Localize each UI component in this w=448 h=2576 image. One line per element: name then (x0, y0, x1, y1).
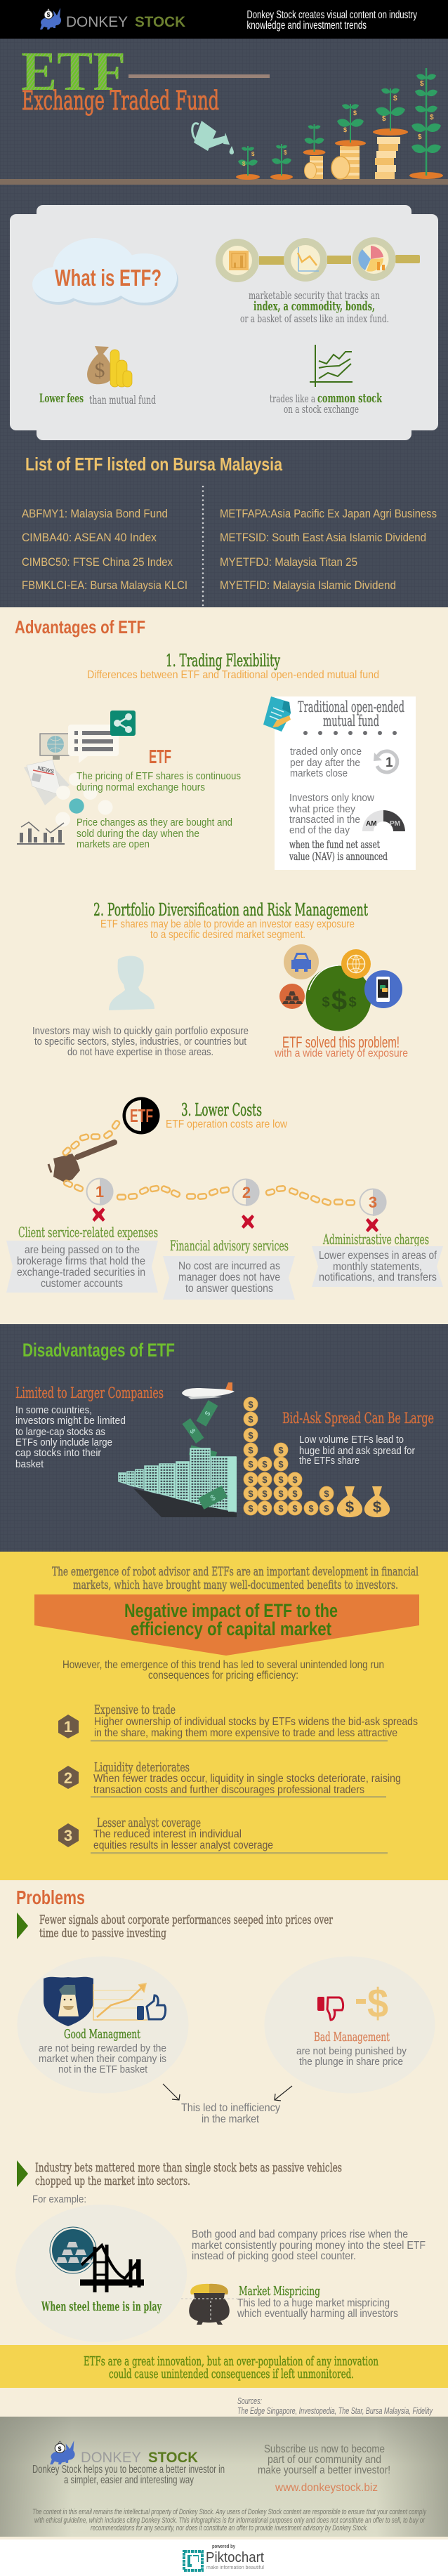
plant 6: $ (420, 80, 424, 88)
consequence 2: 2 (64, 1769, 72, 1787)
icon: thumbs down (317, 1997, 343, 2020)
icon row: index, commodity, bonds (216, 237, 420, 282)
consequence 3 (58, 1816, 388, 1854)
bad management text: the plunge in share price (299, 2056, 403, 2068)
heading: lower costs: ETF operation costs are low (166, 1118, 287, 1130)
cost item 1: Client service-related expenses (18, 1224, 158, 1241)
inefficiency text: This led to inefficiency (181, 2102, 280, 2114)
icon: stacks of coins: $ (292, 1503, 298, 1514)
plant 4: $ (353, 110, 357, 117)
divider (202, 487, 204, 607)
heading: advantages: Advantages of ETF (15, 616, 145, 638)
panel: traditional mutual fund: mutual fund (323, 713, 379, 729)
icon: money bags: $ (345, 1498, 354, 1516)
good management text: Good Managment (64, 2027, 141, 2042)
good management text (39, 2027, 166, 2075)
consequence 2 (58, 1760, 401, 1797)
ETF solved text (274, 1033, 408, 1059)
consequence 1: in the share, making them more expensive to trade and less attractive (94, 1727, 397, 1739)
good management text: are not being rewarded by the (39, 2042, 166, 2054)
heading: disadvantages: Disadvantages of ETF (22, 1340, 175, 1361)
header tagline (247, 9, 417, 32)
icon: stacks of coins: $ (248, 1474, 253, 1485)
cost item 2: manager does not have (178, 1272, 280, 1283)
icon: share (110, 711, 136, 736)
icon: red crosses (93, 1208, 378, 1232)
NAV pricing text: end of the day (289, 824, 350, 836)
limited to larger companies text: investors might be limited (15, 1415, 126, 1427)
ETF list left column: CIMBC50: FTSE China 25 Index (22, 555, 173, 569)
icon: growing plants on coin stacks (236, 68, 443, 180)
ETF list right column: MYETFID: Malaysia Islamic Dividend (220, 579, 396, 592)
gold bubble (279, 984, 305, 1009)
icon: stacks of coins: $ (248, 1399, 253, 1410)
ETF list left column: FBMKLCI-EA: Bursa Malaysia KLCI (22, 579, 187, 592)
arrow: right (275, 2086, 292, 2101)
icon: money bags (337, 1486, 390, 1517)
shelf (0, 179, 448, 185)
heading: problems: Problems (16, 1887, 85, 1908)
subscribe text: Subscribe us now to become (264, 2443, 385, 2455)
footer logo: $ (58, 2445, 62, 2452)
cost item 1 (6, 1224, 158, 1293)
numbered steps (87, 1178, 386, 1216)
logo wordmark: STOCK (135, 14, 185, 30)
market mispricing text: which eventually harming all investors (237, 2308, 398, 2320)
market mispricing text: This led to a huge market mispricing (237, 2297, 390, 2309)
globe bubble (341, 949, 371, 979)
definition text: marketable security that tracks an (249, 289, 380, 302)
icon: person silhouette (109, 956, 154, 1010)
ETF list right column (220, 507, 437, 592)
footer logo (50, 2440, 198, 2466)
ETF column text: ETF (149, 746, 171, 767)
cost item 3: notifications, and transfers (319, 1272, 437, 1283)
bid-ask spread text: the ETFs share (299, 1455, 360, 1467)
common stock text: common stock (317, 391, 382, 406)
icon: shield manager (44, 1977, 93, 2026)
logo wordmark (66, 14, 185, 30)
panel: steel theme (15, 2205, 187, 2342)
cost item 3 (312, 1231, 443, 1287)
consequence 3: The reduced interest in individual (93, 1828, 242, 1840)
consequence 1: Expensive to trade (94, 1703, 176, 1717)
heading: lower costs: 3. Lower Costs (181, 1100, 262, 1120)
cost item 2: Financial advisory services (170, 1237, 289, 1254)
icon: diversified exposure bubbles (279, 944, 402, 1031)
footer tagline: a simpler, easier and interesting way (64, 2474, 194, 2486)
ETF column text: markets are open (77, 838, 150, 850)
icon: airplane (182, 1382, 235, 1399)
lower fees text: than mutual fund (89, 393, 156, 407)
icon: stacks of coins: $ (324, 1503, 329, 1514)
plant 1: $ (251, 151, 255, 157)
ETF list left column: CIMBA40: ASEAN 40 Index (22, 531, 157, 544)
bad management text: Bad Management (314, 2030, 390, 2045)
consequence 2: When fewer trades occur, liquidity in single stocks deteriorate, raising (93, 1773, 401, 1785)
icon: money bags: $ (373, 1498, 381, 1516)
icon: ETF ball (122, 1097, 160, 1135)
good management text: not in the ETF basket (58, 2063, 148, 2075)
panel: bad management (264, 1956, 435, 2094)
consequences text: However, the emergence of this trend has led to several unintended long run (62, 1659, 384, 1671)
definition text: index, a commodity, bonds, (253, 299, 375, 314)
icon: monitor (40, 734, 70, 760)
plant 3 (303, 124, 326, 179)
illustration: city buildings (119, 1448, 237, 1517)
chain links (62, 1120, 355, 1206)
consequence 3: Lesser analyst coverage (97, 1816, 201, 1830)
problem statement 1: time due to passive investing (39, 1927, 166, 1941)
icon: ETF ball: ETF (130, 1105, 153, 1126)
common stock text: on a stock exchange (284, 403, 359, 416)
piktochart badge: powered by (212, 2544, 235, 2549)
icon: stacks of coins: $ (308, 1503, 314, 1514)
plant 4: $ (343, 126, 347, 133)
plant 5: $ (393, 95, 397, 103)
limited to larger companies text: In some countries, (15, 1404, 92, 1416)
inefficiency text: in the market (202, 2113, 259, 2125)
heading: trading flexibility: 1. Trading Flexibility (166, 651, 280, 671)
investors text: to specific sectors, styles, industries, or countries but (34, 1036, 247, 1048)
icon: circular arrow one (374, 751, 397, 772)
plant 2: $ (284, 150, 287, 156)
icon: stacks of coins: $ (262, 1474, 268, 1485)
phone bubble (364, 970, 402, 1008)
icon: circular arrow one: 1 (386, 755, 393, 770)
panel: what is ETF (10, 205, 438, 440)
bid-ask spread text: huge bid and ask spread for (299, 1445, 415, 1457)
consequences text (62, 1659, 384, 1682)
piktochart badge (184, 2544, 264, 2570)
sources: Sources: (237, 2396, 262, 2406)
problem statement 1 (17, 1913, 334, 1941)
icon cluster: ETF pricing (17, 711, 136, 845)
steel explanation text (192, 2228, 426, 2262)
heading: trading flexibility (87, 651, 379, 681)
icon: stacks of coins: $ (262, 1503, 268, 1514)
icon: diversified exposure bubbles: $ (322, 995, 330, 1010)
cost item 3: monthly statements, (333, 1261, 422, 1273)
icon: newspaper: NEWS (37, 765, 55, 775)
plant 6: $ (430, 114, 434, 121)
problem statement 2 (17, 2160, 342, 2188)
cost item 2 (163, 1237, 295, 1300)
plant 1: $ (242, 161, 246, 167)
ETF list right column: METFSID: South East Asia Islamic Dividend (220, 531, 426, 544)
once per day text (290, 746, 362, 779)
icon: stacks of coins: $ (248, 1430, 253, 1441)
piktochart badge: make information beautiful (206, 2565, 264, 2570)
icon: stacks of coins: $ (248, 1414, 253, 1425)
icon: stacks of coins: $ (248, 1445, 253, 1455)
icon: stacks of coins: $ (278, 1488, 284, 1499)
definition text (240, 289, 389, 325)
icon: line chart (310, 345, 353, 387)
problem statement 1: Fewer signals about corporate performances seeped into prices over (39, 1913, 334, 1927)
heading: portfolio diversification: to a specific desired market segment. (150, 929, 305, 941)
illustration: city buildings: $ (209, 1493, 217, 1503)
ETF solved text: with a wide variety of exposure (274, 1048, 408, 1059)
definition text: or a basket of assets like an index fund. (240, 312, 389, 325)
steel explanation text: instead of picking good steel counter. (192, 2250, 356, 2262)
bad management text (296, 2030, 407, 2068)
icon: AM PM gauge: PM (390, 820, 400, 828)
header tagline: knowledge and investment trends (247, 20, 367, 32)
consequence 1: 1 (64, 1718, 72, 1736)
icon: AM PM gauge: AM (366, 820, 377, 828)
NAV bold text (289, 838, 388, 863)
icon: donkey logo (40, 8, 61, 29)
icon: minus dollar: $ (367, 1981, 388, 2026)
footer tagline (32, 2464, 225, 2486)
sources (237, 2396, 433, 2416)
subscribe text: make yourself a better investor! (258, 2464, 390, 2476)
panel: good management (17, 1956, 188, 2094)
limited to larger companies text (15, 1385, 164, 1470)
icon: bar chart (17, 822, 65, 845)
arrow: left (163, 2084, 180, 2100)
cost item 1: brokerage firms that hold the (17, 1255, 145, 1267)
icon: stacks of coins: $ (324, 1488, 329, 1499)
icon: falling money (183, 1400, 218, 1462)
once per day text: traded only once (290, 746, 362, 758)
consequence 3: equities results in lesser analyst coverage (93, 1839, 273, 1851)
NAV pricing text (289, 792, 374, 836)
consequence 2: Liquidity deteriorates (94, 1760, 190, 1775)
icon: stacks of coins: $ (278, 1474, 284, 1485)
limited to larger companies text: basket (15, 1458, 44, 1470)
icon: newspaper (24, 760, 70, 805)
footer tagline: Donkey Stock helps you to become a better investor in (32, 2464, 225, 2476)
cost item 2: to answer questions (185, 1283, 273, 1295)
ETF column text: The pricing of ETF shares is continuous (77, 770, 241, 782)
lower fees text: Lower fees (39, 392, 84, 406)
conclusion text (84, 2354, 378, 2382)
icon: stacks of coins: $ (278, 1503, 284, 1514)
icon: stacks of coins: $ (248, 1503, 253, 1514)
cost item 1: customer accounts (41, 1278, 123, 1290)
ETF list left column (22, 507, 187, 592)
market mispricing text: Market Mispricing (239, 2284, 320, 2299)
numbered steps: 1 (95, 1183, 104, 1201)
footer logo: STOCK (148, 2450, 198, 2466)
icon: gold bars (50, 2227, 96, 2273)
icon: diversified exposure bubbles: $ (331, 985, 347, 1016)
icon: rising chart (93, 1983, 147, 2020)
subscribe text: part of our community and (268, 2454, 381, 2466)
plant 1 (236, 146, 260, 180)
icon: falling money: $ (188, 1427, 197, 1436)
heading: lower costs (166, 1100, 287, 1130)
NAV pricing text: what price they (289, 803, 355, 815)
once per day text: markets close (290, 767, 348, 779)
decorative connector dots (55, 773, 112, 827)
icon: stacks of coins: $ (248, 1459, 253, 1469)
icon: stacks of coins: $ (262, 1488, 268, 1499)
icon: document (263, 696, 291, 732)
plant 6 (409, 68, 443, 179)
heading: trading flexibility: Differences between ETF and Traditional open-ended mutual fund (87, 669, 379, 681)
icon: stacks of coins: $ (292, 1474, 298, 1485)
heading: portfolio diversification: ETF shares may be able to provide an investor easy exposure (100, 918, 355, 930)
investors text: do not have expertise in those areas. (67, 1046, 213, 1058)
steel theme caption: When steel theme is in play (41, 2299, 162, 2314)
icon: diversified exposure bubbles: $ (348, 995, 357, 1010)
icon: stacks of coins (244, 1397, 334, 1515)
consequence 1 (58, 1703, 418, 1741)
cloud with heading: What is ETF? (55, 265, 162, 291)
market mispricing text (237, 2284, 398, 2320)
once per day text: per day after the (290, 757, 360, 769)
plant 4 (331, 104, 366, 179)
cost item 1: are being passed on to the (25, 1244, 140, 1256)
disclaimer (32, 2508, 427, 2532)
intro text: robot advisors (52, 1565, 419, 1592)
icon: hammer (48, 1142, 114, 1182)
icon: money bag and coins: $ (94, 359, 105, 382)
limited to larger companies text: ETFs only include large (15, 1436, 112, 1448)
inefficiency text (181, 2102, 280, 2125)
car bubble (284, 944, 319, 979)
icon: stacks of coins: $ (292, 1488, 298, 1499)
icon: minus dollar (356, 1981, 388, 2026)
for example text: For example: (32, 2193, 86, 2205)
ETF column text: sold during the day when the (77, 828, 199, 840)
icon: pot of gold (181, 2284, 237, 2325)
plant 5 (373, 88, 408, 179)
icon: AM PM gauge (362, 810, 405, 831)
limited to larger companies text: cap stocks into their (15, 1447, 101, 1459)
common stock text: trades like a (270, 392, 315, 405)
banner: negative impact: efficiency of capital market (131, 1618, 331, 1639)
subscribe text (258, 2443, 390, 2494)
cost item 2: No cost are incurred as (178, 1260, 280, 1272)
icon: money bag and coins (87, 346, 132, 387)
title: Exchange Traded Fund (22, 86, 219, 116)
banner: negative impact: Negative impact of ETF to the (124, 1600, 338, 1621)
icon: falling money: $ (204, 1410, 213, 1418)
limited to larger companies text: to large-cap stocks as (15, 1426, 105, 1438)
icon: piktochart mark (184, 2551, 202, 2570)
good management text: market when their company is (39, 2053, 166, 2065)
title (21, 41, 270, 116)
steel explanation text: Both good and bad company prices rise when the (192, 2228, 408, 2240)
heading: list of ETF: List of ETF listed on Bursa Malaysia (25, 454, 282, 475)
NAV bold text: when the fund net asset (289, 838, 380, 851)
plant 2 (270, 144, 293, 180)
consequence 2: transaction costs and further discourages professional traders (93, 1784, 364, 1796)
icon: chat bubble (68, 725, 119, 763)
bid-ask spread text (282, 1410, 434, 1467)
cloud with heading (32, 238, 178, 305)
title: ETF (21, 41, 126, 103)
plant 6: $ (418, 133, 422, 141)
icon: stacks of coins: $ (248, 1488, 253, 1499)
bad management text: are not being punished by (296, 2045, 407, 2057)
cost item 1: exchange-traded securities in (17, 1267, 145, 1279)
heading: portfolio diversification (93, 900, 368, 941)
header bar (0, 0, 448, 39)
numbered steps: 2 (242, 1184, 251, 1201)
problem statement 2: chopped up the market into sectors. (35, 2174, 190, 2188)
icon: stacks of coins: $ (262, 1459, 268, 1469)
limited to larger companies text: Limited to Larger Companies (15, 1385, 164, 1401)
ETF column text (77, 746, 241, 850)
NAV bold text: value (NAV) is announced (289, 850, 388, 863)
common stock text (270, 391, 382, 416)
icon: falling money: $ (200, 1450, 206, 1459)
NAV pricing text: transacted in the (289, 814, 360, 826)
numbered steps: 3 (369, 1194, 377, 1211)
banner: negative impact (34, 1594, 419, 1656)
NAV pricing text: Investors only know (289, 792, 374, 804)
piktochart badge: Piktochart (206, 2550, 264, 2565)
ETF column text: during normal exchange hours (77, 781, 205, 793)
icon: stacks of coins: $ (278, 1445, 284, 1455)
bid-ask spread text: Low volume ETFs lead to (299, 1434, 404, 1446)
plant 5: $ (382, 115, 386, 123)
ETF list right column: MYETFDJ: Malaysia Titan 25 (220, 555, 357, 569)
consequence 3: 3 (64, 1827, 72, 1844)
logo wordmark: DONKEY (66, 14, 128, 30)
footer logo: DONKEY (81, 2450, 141, 2466)
ETF list left column: ABFMY1: Malaysia Bond Fund (22, 507, 168, 520)
icon: stacks of coins: $ (278, 1459, 284, 1469)
ETF column text: Price changes as they are bought and (77, 817, 232, 828)
icon: donkey logo: $ (46, 11, 51, 18)
investors text: Investors may wish to quickly gain portfolio exposure (32, 1025, 249, 1037)
lower fees text (39, 392, 156, 407)
panel: traditional mutual fund (263, 696, 416, 870)
icon: thumbs up (137, 1995, 166, 2020)
icon: watering can (192, 121, 234, 154)
investors text (32, 1025, 249, 1058)
subscribe text: www.donkeystock.biz (275, 2482, 378, 2494)
icon: bridge (80, 2245, 144, 2292)
consequences text: consequences for pricing efficiency: (148, 1670, 298, 1682)
